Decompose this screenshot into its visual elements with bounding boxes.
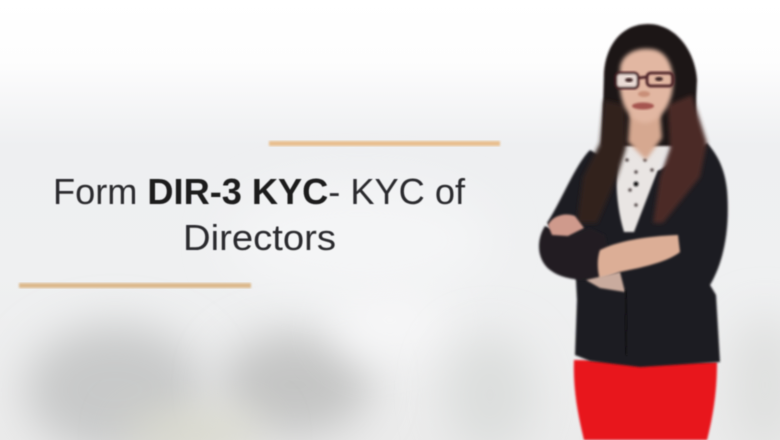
jacket body	[547, 143, 728, 367]
face	[620, 49, 673, 123]
top accent line	[269, 141, 500, 146]
nose shadow	[638, 91, 650, 97]
crossed sleeve left	[539, 226, 612, 280]
waist skin gap	[586, 272, 625, 292]
jacket opening	[625, 290, 627, 355]
title: Directors	[183, 217, 336, 258]
hair back	[602, 24, 697, 146]
person: woman with crossed arms	[539, 24, 728, 440]
hair left lock	[577, 100, 626, 223]
bottom accent line	[19, 283, 251, 288]
hair right lock	[653, 95, 707, 223]
lips	[632, 102, 654, 110]
blouse	[617, 140, 670, 232]
title: Form DIR-3 KYC- KYC of	[53, 171, 466, 212]
title	[53, 171, 466, 258]
eyes	[625, 78, 633, 82]
forearm	[598, 235, 680, 280]
skirt	[574, 360, 717, 440]
hand	[548, 214, 584, 236]
neck	[628, 112, 662, 160]
glasses	[616, 73, 673, 88]
